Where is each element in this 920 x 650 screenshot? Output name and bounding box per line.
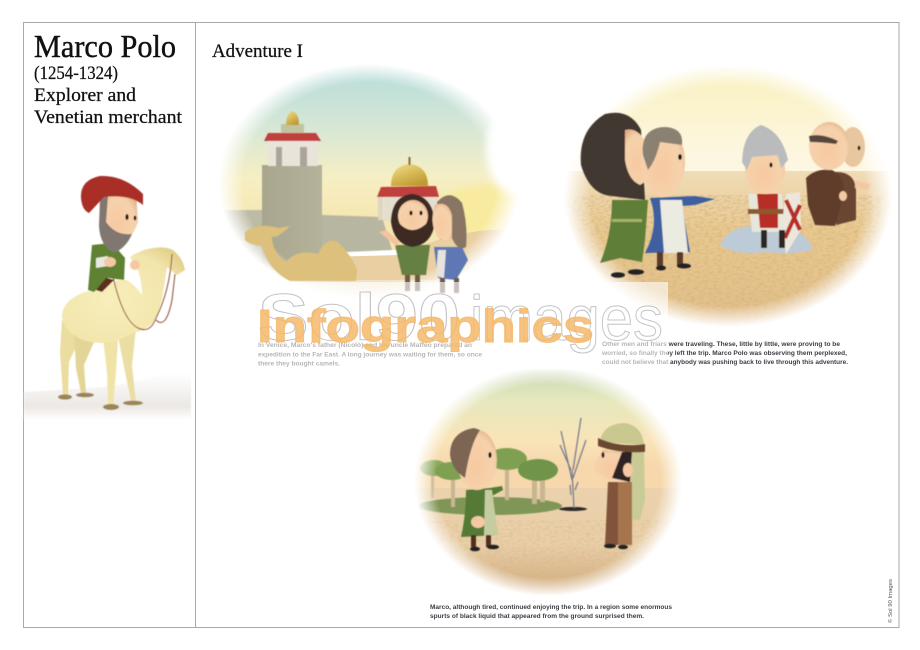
caption: scene 3: Marco, although tired, continued enjoying the trip. In a region some enormous [430, 604, 673, 611]
sky [416, 370, 680, 488]
panel: scene 3 - black liquid in the desert [416, 370, 680, 595]
title block [34, 28, 183, 128]
Maffeo figure [432, 195, 468, 293]
camel [60, 247, 185, 405]
scene 3 background [416, 370, 680, 595]
Marco pointing in blue tunic [641, 127, 715, 270]
illustration: Marco Polo on camel [24, 176, 191, 420]
scene 1 foreground [245, 194, 468, 293]
caption: scene 2: could not believe that anybody was pushing back to live through this adventure. [602, 359, 848, 366]
dates: (1254-1324) [34, 63, 118, 84]
panel: scene 1 - Venice mosque and camel [222, 66, 516, 294]
watermark outline: images: images [470, 284, 663, 354]
ground shadow [24, 373, 191, 420]
watermark veil [257, 282, 668, 370]
Arab man [594, 423, 645, 549]
caption: scene 1: expedition to the Far East. A long journey was waiting for them, so once [258, 352, 483, 358]
caption: scene 3: spurts of black liquid that appeared from the ground surprised them. [430, 613, 644, 620]
oasis grass [418, 497, 562, 515]
watermark outline: Sol90: Sol90 [258, 280, 460, 354]
Marco's companion in green with long hair [581, 113, 652, 278]
scene 2 background [566, 68, 890, 326]
Marco head [100, 192, 138, 247]
panel: scene 2 - travellers and knight on desert [566, 68, 890, 326]
role line 2: Venetian merchant [34, 107, 183, 128]
Marco hat [81, 176, 143, 213]
role line 1: Explorer and [34, 85, 137, 106]
scene 1 background [222, 66, 516, 293]
Marco body [88, 243, 125, 292]
watermark orange word: Infographics [257, 300, 594, 352]
second friar [836, 127, 870, 225]
caption: scene 2: Other men and friars were traveling. These, little by little, were proving to be [602, 341, 841, 348]
title: Marco Polo: Marco Polo [34, 28, 176, 64]
caption: scene 1 [258, 342, 483, 368]
caption: scene 3 [430, 604, 673, 620]
watermark: Sol90images Infographics [257, 280, 668, 370]
Nicolo figure [379, 194, 435, 291]
sky [575, 68, 881, 171]
caption: scene 1: there they bought camels. [258, 360, 340, 368]
caption: scene 1: In Venice, Marco's father (Nicolò) and his uncle Maffeo prepared an [258, 342, 472, 349]
camel hooves [58, 393, 143, 410]
dead tree and black spurt [559, 418, 587, 511]
caption: scene 2 [601, 341, 848, 366]
palm trees [420, 448, 558, 507]
minaret tower [262, 111, 322, 270]
caption: scene 2: worried, so finally they left the trip. Marco Polo was observing them perplexed, [601, 350, 847, 357]
copyright credit: © Sol 90 Images [887, 579, 894, 623]
first friar [806, 122, 849, 226]
warm horizon glow [438, 182, 510, 233]
Marco [450, 428, 503, 551]
scene 2 foreground [581, 113, 870, 278]
scene 3 foreground [450, 423, 645, 551]
ground [273, 230, 498, 280]
desert ground [566, 171, 890, 326]
city wall [322, 215, 392, 253]
gold dome pavilion [377, 157, 439, 221]
sky [222, 66, 501, 250]
reins [112, 254, 175, 330]
seated knight on rock [720, 125, 812, 254]
heading: Adventure I: Adventure I [212, 41, 303, 62]
camel lying [245, 226, 357, 281]
ground [417, 488, 679, 595]
